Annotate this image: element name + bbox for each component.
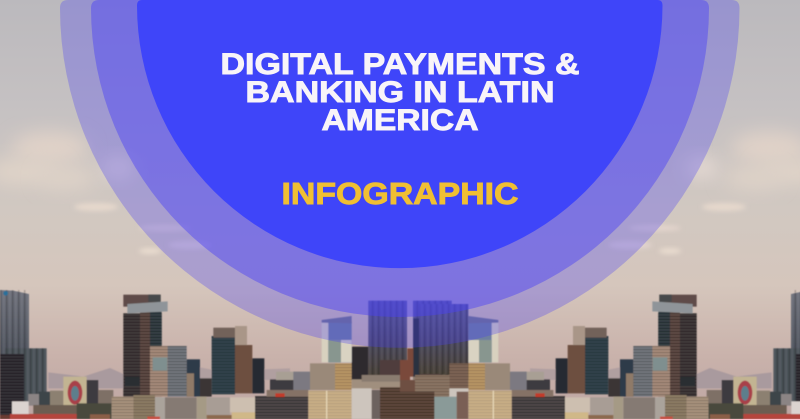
inner solid semicircle bbox=[137, 0, 662, 268]
middle translucent semicircle bbox=[91, 0, 709, 317]
subtitle: INFOGRAPHIC bbox=[282, 176, 518, 211]
outer translucent semicircle bbox=[60, 0, 740, 348]
mirrored clouds bbox=[0, 132, 800, 254]
title: DIGITAL PAYMENTS & bbox=[220, 48, 580, 81]
mirrored city skyline bbox=[0, 290, 800, 419]
title: BANKING IN LATIN bbox=[246, 76, 554, 109]
title: AMERICA bbox=[322, 104, 478, 137]
title bbox=[220, 48, 580, 137]
